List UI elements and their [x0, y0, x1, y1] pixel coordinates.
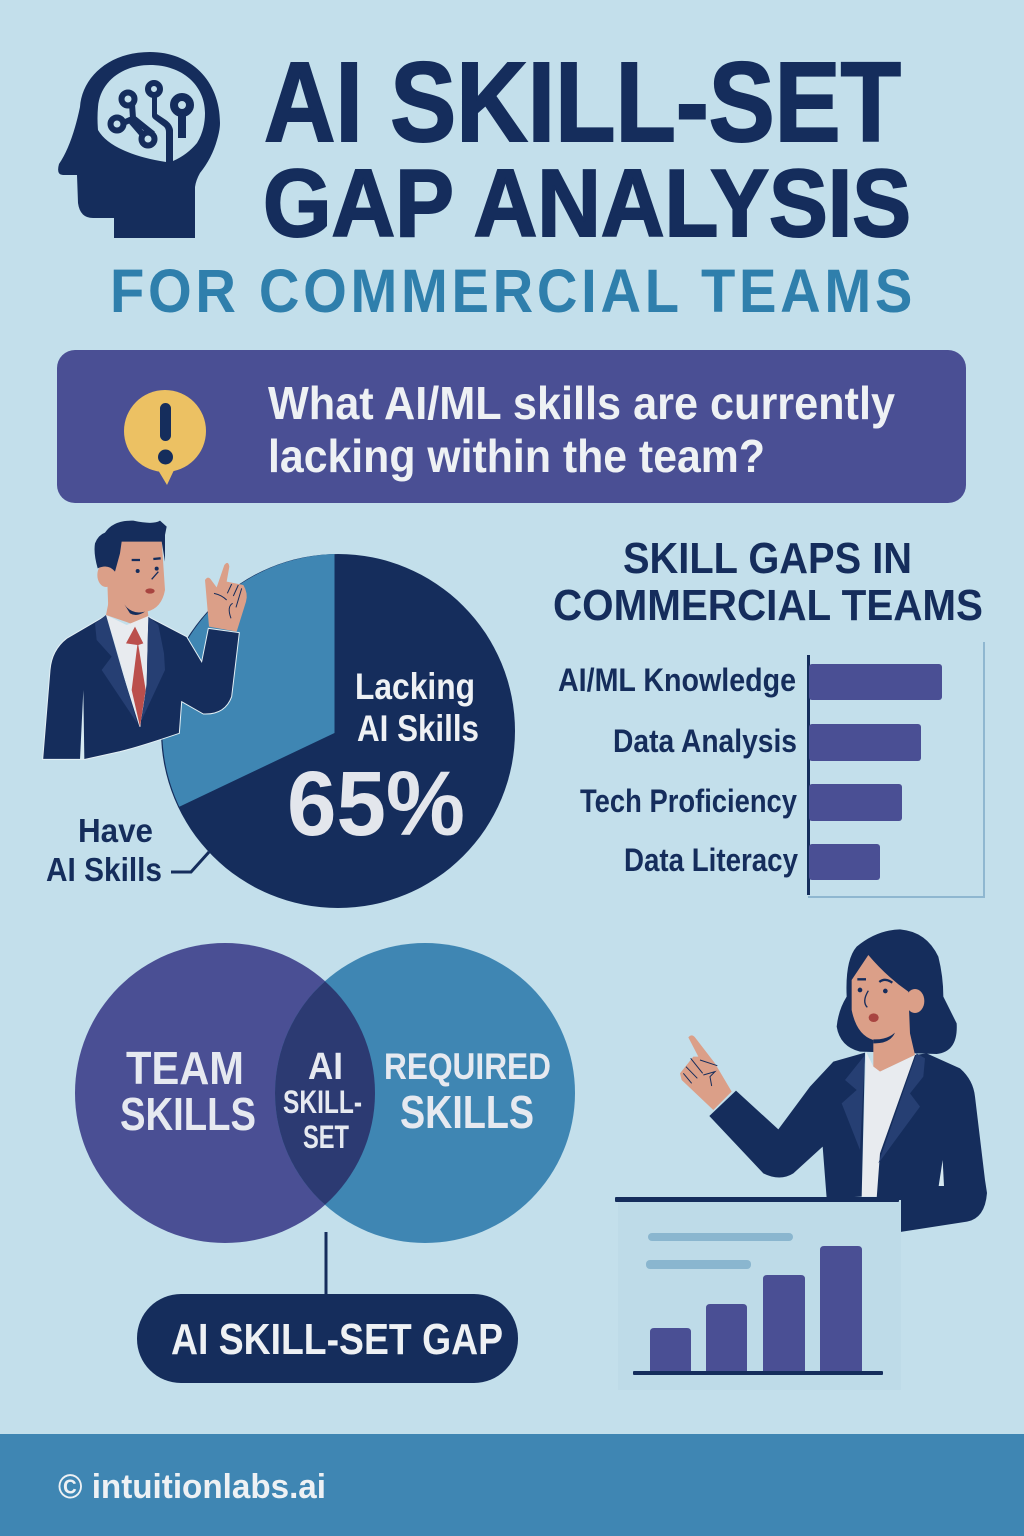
icon: AI head with circuit brain: [58, 52, 220, 238]
footer bar: [0, 1434, 1024, 1536]
footer bar: © intuitionlabs.ai: [58, 1468, 326, 1506]
pie label: lacking AI skills: Lacking: [355, 666, 475, 707]
venn label: team skills: SKILLS: [120, 1088, 256, 1140]
connector line: [324, 1232, 328, 1296]
title: GAP ANALYSIS: [263, 150, 911, 257]
venn label: AI skill-set: AI: [308, 1046, 343, 1088]
venn label: required skills: REQUIRED: [384, 1046, 551, 1087]
venn label: required skills: [384, 1046, 551, 1138]
question text: lacking within the team?: [268, 430, 765, 482]
bar: Data Literacy: Data Literacy: [624, 842, 798, 878]
venn label: AI skill-set: [283, 1046, 362, 1155]
venn label: AI skill-set: SET: [303, 1119, 349, 1155]
pie label: lacking AI skills: AI Skills: [357, 708, 479, 749]
venn label: team skills: [120, 1042, 256, 1140]
pill: AI skill-set gap: AI SKILL-SET GAP: [171, 1315, 503, 1364]
bar: Data Analysis: [613, 723, 921, 761]
bar: Data Analysis: Data Analysis: [613, 723, 797, 759]
heading: skill gaps: SKILL GAPS IN: [623, 534, 912, 583]
title: AI SKILL-SET: [264, 39, 901, 165]
venn diagram: [75, 943, 575, 1243]
bar chart: skill gaps: [558, 642, 984, 897]
pie label: have AI skills: [46, 812, 209, 888]
subtitle: FOR COMMERCIAL TEAMS: [110, 257, 916, 325]
bar: Tech Proficiency: Tech Proficiency: [580, 783, 797, 819]
pie label: lacking AI skills: [287, 666, 479, 855]
venn label: team skills: TEAM: [126, 1042, 244, 1094]
panel: question banner: [57, 350, 966, 503]
pie label: have AI skills: AI Skills: [46, 851, 162, 888]
pie chart: [161, 554, 515, 908]
pie label: lacking AI skills: 65%: [287, 753, 465, 855]
pill: AI skill-set gap: [137, 1294, 518, 1383]
illustration: businesswoman pointing: [680, 929, 987, 1232]
pie label: have AI skills: Have: [78, 812, 153, 849]
question text: [268, 377, 895, 482]
illustration: presentation board with bar chart: [615, 1197, 901, 1390]
icon: exclamation speech bubble: [124, 390, 206, 485]
venn label: AI skill-set: SKILL-: [283, 1084, 362, 1120]
heading: skill gaps: [553, 534, 983, 630]
venn label: required skills: SKILLS: [400, 1086, 534, 1138]
bar: AI/ML Knowledge: AI/ML Knowledge: [558, 662, 796, 698]
question text: What AI/ML skills are currently: [268, 377, 895, 429]
heading: skill gaps: COMMERCIAL TEAMS: [553, 581, 983, 630]
bar: AI/ML Knowledge: [558, 662, 942, 700]
title: [263, 39, 911, 257]
illustration: businessman pointing: [43, 521, 247, 759]
